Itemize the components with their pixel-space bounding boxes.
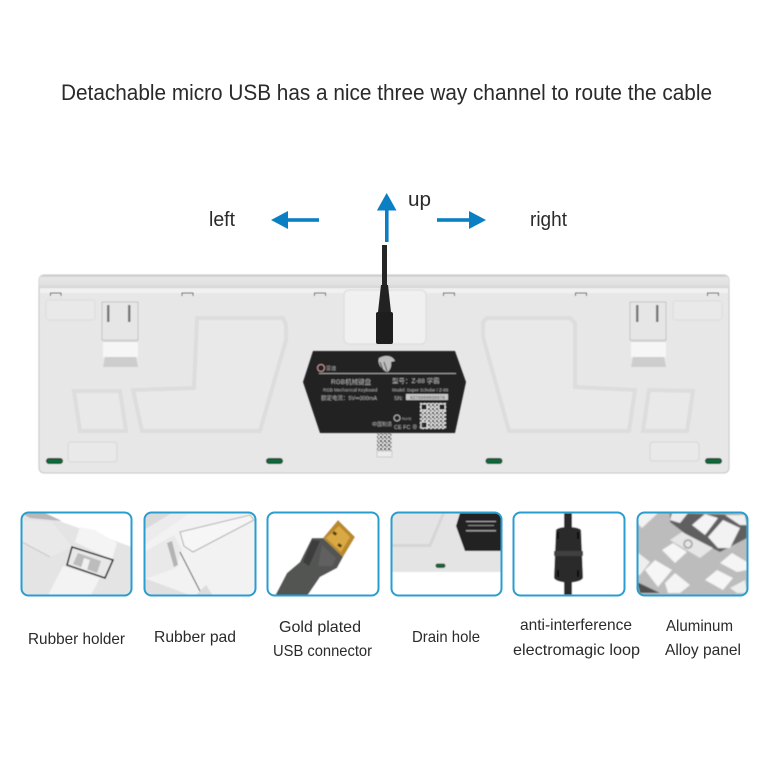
caption: drain hole: Drain hole xyxy=(412,629,480,646)
eagle logo xyxy=(378,356,395,372)
direction label: right: right xyxy=(530,209,567,231)
right small recess xyxy=(643,390,693,431)
left folding foot xyxy=(102,302,138,367)
caption: anti-interference loop: electromagic loop xyxy=(513,642,640,659)
qr sticker xyxy=(377,433,392,457)
product label xyxy=(303,351,466,433)
thumbnail: gold plated usb connector xyxy=(267,512,379,596)
thumbnail: aluminum alloy panel xyxy=(637,512,749,596)
right raised pad xyxy=(673,301,722,320)
thumbnail: rubber pad xyxy=(144,512,256,596)
caption: rubber holder: Rubber holder xyxy=(28,631,126,648)
caption: gold plated usb connector xyxy=(273,619,373,660)
made in china: 中国制造 xyxy=(372,421,392,428)
arrow: up xyxy=(377,193,396,242)
caption: rubber pad: Rubber pad xyxy=(154,629,236,646)
right folding foot xyxy=(630,302,666,367)
label plate xyxy=(303,351,466,433)
drain holes xyxy=(46,458,722,464)
left large recess xyxy=(133,318,286,431)
serial box xyxy=(406,394,448,401)
right large recess xyxy=(483,318,635,431)
left raised pad xyxy=(46,300,95,320)
certification marks: RoHS xyxy=(402,417,412,421)
thumbnail: drain hole xyxy=(391,512,503,596)
top edge band xyxy=(39,275,729,288)
certification marks xyxy=(394,415,425,431)
caption: gold plated usb connector: Gold plated xyxy=(279,619,361,636)
label text left: RGB Mechanical Keyboard xyxy=(323,388,378,392)
qr code xyxy=(420,403,446,429)
direction label: up: up xyxy=(408,189,431,211)
caption: aluminum alloy panel: Alloy panel xyxy=(665,642,741,659)
brand mark: 雷迪 xyxy=(326,365,336,372)
left lower pad xyxy=(68,442,117,462)
clips xyxy=(50,293,718,296)
caption: anti-interference loop xyxy=(513,617,640,659)
brand mark xyxy=(318,364,336,372)
label text left xyxy=(321,377,378,402)
label text left: 额定电流：5V⎓300mA xyxy=(321,394,377,402)
arrow: right xyxy=(437,211,486,229)
label text left: RGB机械键盘 xyxy=(331,377,372,386)
thumbnail: rubber holder xyxy=(21,512,132,597)
thumbnail: anti-interference loop xyxy=(513,512,626,596)
left small recess xyxy=(74,391,126,431)
usb cable xyxy=(376,245,393,344)
caption: anti-interference loop: anti-interference xyxy=(520,617,632,634)
caption: gold plated usb connector: USB connector xyxy=(273,643,373,660)
keyboard underside xyxy=(39,275,729,473)
second edge strip xyxy=(40,288,728,293)
label text right: Model: Super Scholar / Z-88 xyxy=(392,388,449,392)
certification marks: CE FC ⊕ ♲ xyxy=(394,424,425,431)
label text right: 型号：Z-88 学霸 xyxy=(392,376,440,385)
keyboard body xyxy=(39,275,729,473)
label text right: SN: xyxy=(394,396,404,402)
direction label: left: left xyxy=(209,209,235,231)
cable channel xyxy=(344,290,426,344)
caption: aluminum alloy panel xyxy=(665,618,741,659)
divider line xyxy=(319,373,456,374)
serial box: 0Z789000S0978 xyxy=(410,395,445,401)
caption: aluminum alloy panel: Aluminum xyxy=(666,618,733,635)
arrow: left xyxy=(271,211,319,229)
label text right xyxy=(392,376,449,402)
title: Detachable micro USB has a nice three way channel to route the cable xyxy=(61,80,712,105)
right lower pad xyxy=(650,442,699,461)
